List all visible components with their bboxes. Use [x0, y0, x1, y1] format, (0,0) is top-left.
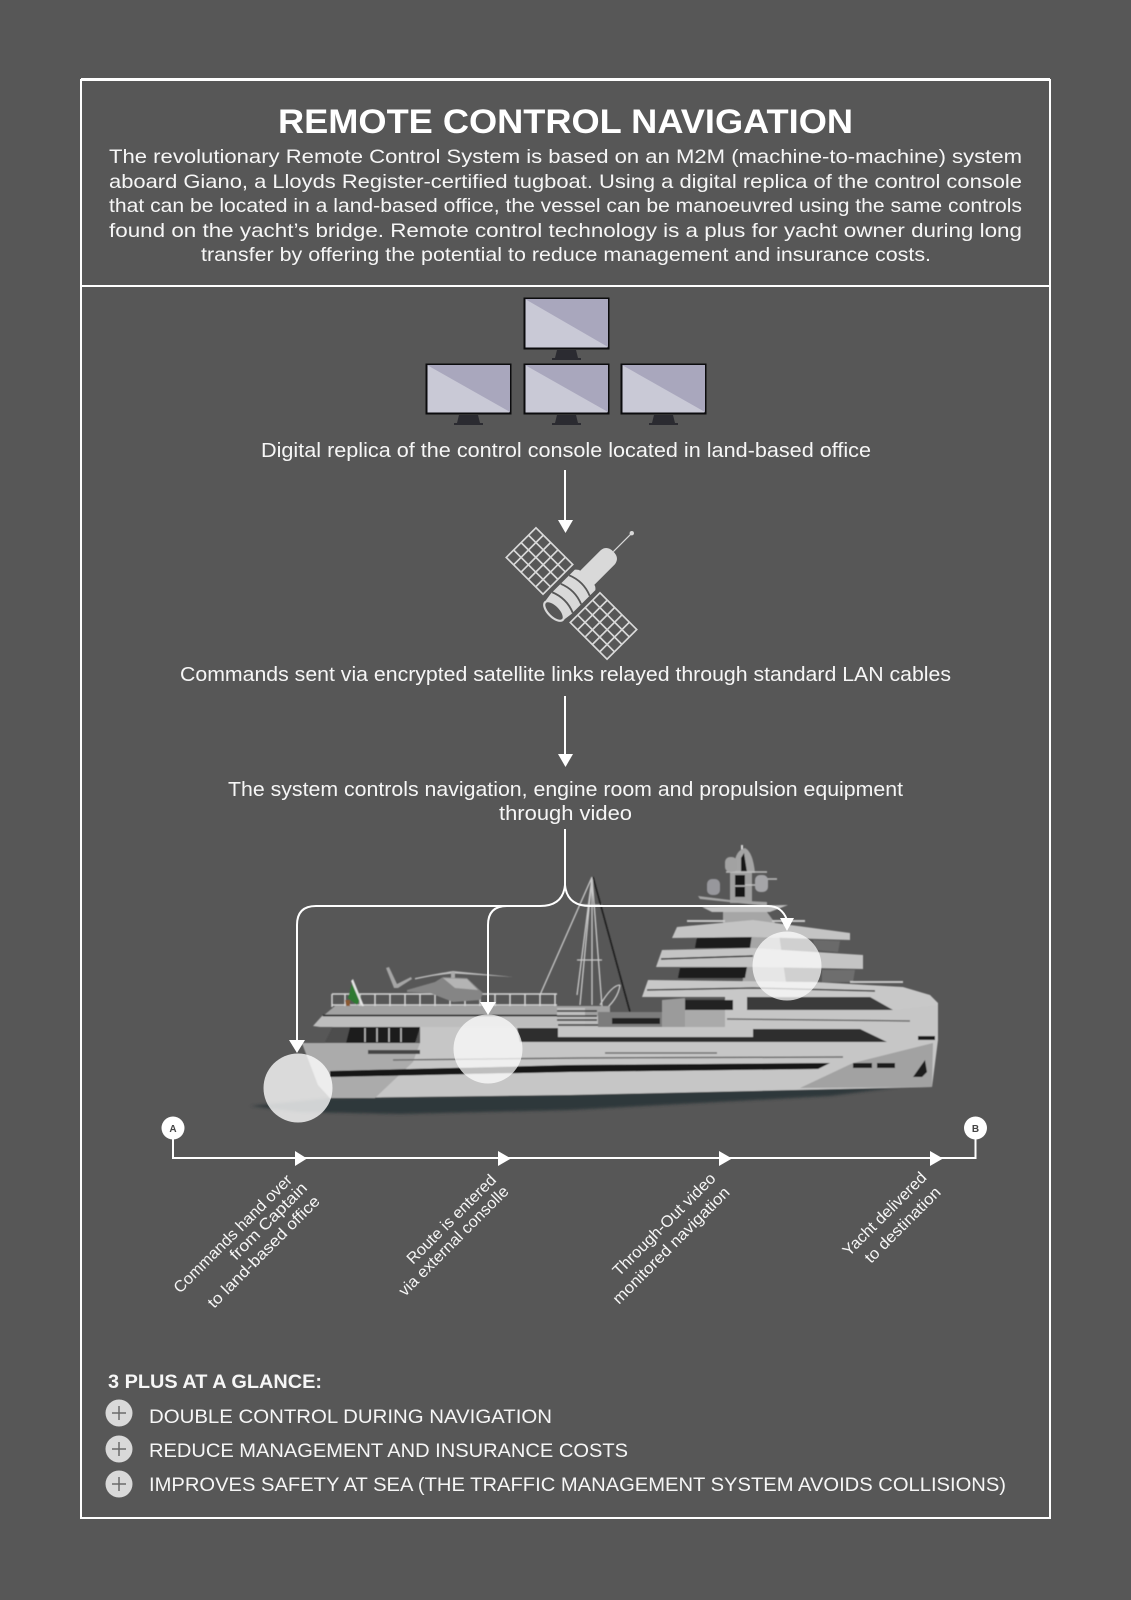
caption: digital replica: Digital replica of the control console located in land-based office: [261, 440, 871, 462]
main hull stripe: [330, 1063, 830, 1077]
highlight circle two: [454, 1014, 522, 1084]
aft hull shade: [302, 1043, 420, 1098]
satellite body: [540, 521, 644, 625]
point B: B: [972, 1124, 979, 1135]
step label: yacht delivered: Yacht delivered: [840, 1169, 930, 1260]
point A: [162, 1116, 184, 1140]
caption: satellite commands: Commands sent via encrypted satellite links relayed through standard LAN cables: [180, 664, 951, 686]
yacht illustration: [250, 845, 938, 1114]
heading: 3 plus at a glance: 3 PLUS AT A GLANCE:: [108, 1372, 322, 1393]
dark hull band: [517, 1028, 887, 1042]
bow windows: [368, 1036, 935, 1077]
platform: [698, 896, 767, 906]
highlight circle one: [264, 1054, 332, 1122]
arrow: console to satellite: [558, 470, 573, 533]
intro paragraph: [109, 146, 1022, 266]
icon: satellite: [506, 521, 644, 659]
solar panel upper: [506, 528, 573, 594]
intro paragraph: The revolutionary Remote Control System is based on an M2M (machine-to-machine) system: [109, 146, 1022, 168]
step label: commands hand over: Commands hand over: [171, 1171, 296, 1297]
lower tier: [642, 980, 938, 1012]
point B: [964, 1116, 987, 1140]
step label: yacht delivered: to destination: [862, 1184, 945, 1267]
middle tier: [656, 948, 863, 969]
aft railing: [332, 994, 557, 1007]
plus item two: REDUCE MANAGEMENT AND INSURANCE COSTS: [149, 1440, 628, 1462]
step label: route entered: Route is entered: [404, 1172, 500, 1268]
outer frame: [81, 79, 1050, 1518]
intro paragraph: found on the yacht’s bridge. Remote control technology is a plus for yacht owner during long: [109, 220, 1022, 242]
solar panel lower: [570, 593, 637, 659]
monitor left: [426, 364, 510, 425]
intro paragraph: aboard Giano, a Lloyds Register-certified tugboat. Using a digital replica of the control console: [109, 171, 1022, 193]
mast spike: [741, 845, 743, 850]
aft windows: [325, 1027, 420, 1043]
step label: commands hand over: to land-based office: [205, 1193, 324, 1312]
plus item one: [106, 1400, 552, 1428]
step label: through-out video: Through-Out video: [610, 1170, 719, 1280]
arrowhead two: [480, 1002, 496, 1015]
highlight circle three: [752, 932, 822, 1000]
stairs: [557, 1008, 585, 1027]
superstructure column: [723, 912, 790, 1010]
step label: commands hand over: from Captain: [227, 1180, 311, 1264]
helicopter: [386, 967, 513, 1002]
yacht hull: [302, 1005, 938, 1098]
arrowhead one: [289, 1040, 305, 1053]
connector arrows to ship: [297, 829, 787, 1042]
bridge glass: [747, 997, 893, 1010]
tier railings: [687, 921, 903, 982]
title: REMOTE CONTROL NAVIGATION: [278, 103, 853, 141]
mast and rigging: [540, 877, 630, 1012]
dome: [735, 848, 755, 873]
intro paragraph: transfer by offering the potential to reduce management and insurance costs.: [201, 244, 931, 266]
tier windows: [678, 935, 855, 982]
hull detail lines: [393, 1019, 910, 1060]
bow texture: [800, 1043, 933, 1088]
aft upper deck: [313, 1006, 610, 1027]
radomes: [725, 857, 737, 872]
water wake: [250, 1087, 900, 1114]
upper tier: [672, 920, 850, 940]
tower columns: [730, 872, 752, 903]
monitor top: [524, 298, 608, 360]
plus item three: IMPROVES SAFETY AT SEA (THE TRAFFIC MANAGEMENT SYSTEM AVOIDS COLLISIONS): [149, 1474, 1006, 1496]
step label: through-out video: monitored navigation: [610, 1184, 734, 1308]
icon: four monitors: [426, 298, 706, 425]
monitor middle: [524, 364, 608, 425]
intro paragraph: that can be located in a land-based office, the vessel can be manoeuvred using the same controls: [109, 195, 1022, 217]
caption: system controls: [228, 779, 903, 825]
caption: system controls: The system controls navigation, engine room and propulsion equipment: [228, 779, 903, 801]
flag: [345, 979, 364, 1015]
arrow: satellite to system: [558, 696, 573, 767]
step label: route entered: via external consolle: [396, 1183, 513, 1300]
midship deck equipment: [598, 1012, 665, 1027]
monitor right: [622, 364, 706, 425]
plus item one: DOUBLE CONTROL DURING NAVIGATION: [149, 1406, 552, 1428]
caption: system controls: through video: [499, 803, 632, 825]
point A: A: [169, 1124, 177, 1135]
route timeline: [162, 1116, 987, 1166]
arrowhead three: [780, 918, 794, 931]
top radar tower: [698, 845, 788, 912]
